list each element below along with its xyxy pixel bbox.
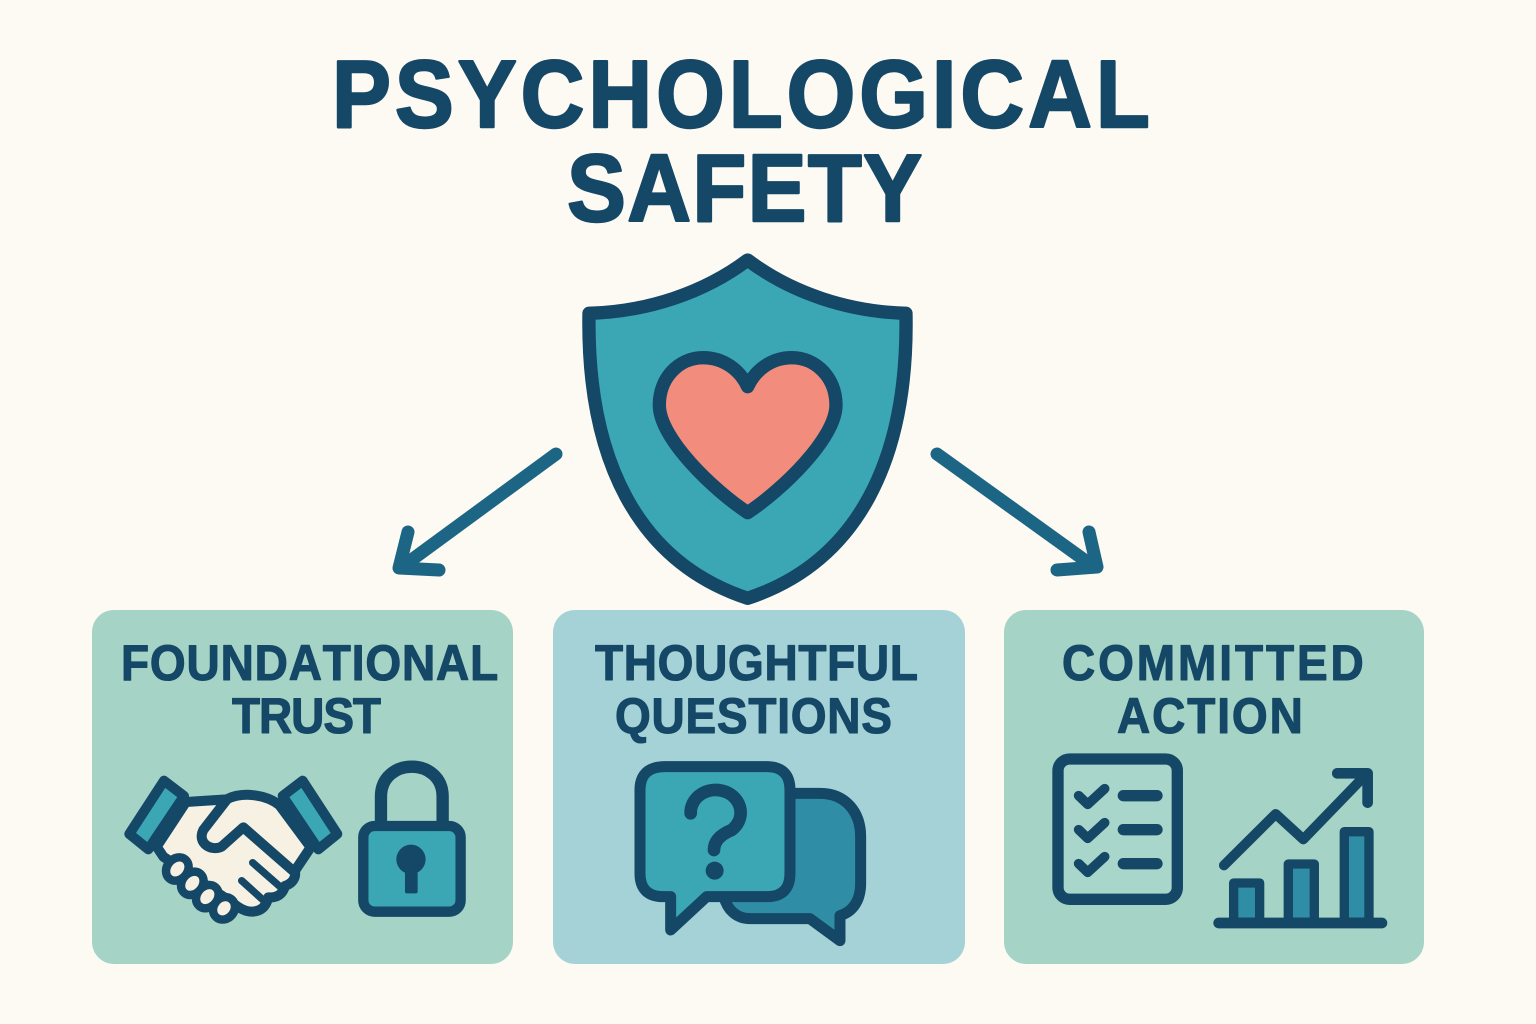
icon: speech bubbles with question mark	[640, 767, 861, 941]
arrow: to committed action	[937, 454, 1097, 570]
icon: padlock	[363, 767, 461, 912]
panel: thoughtful questions	[553, 610, 965, 964]
heading: thoughtful questions	[595, 636, 918, 744]
heading: foundational trust: FOUNDATIONAL	[121, 636, 498, 691]
heading: committed action	[1062, 636, 1364, 744]
panel: committed action	[1004, 610, 1424, 964]
heading: foundational trust	[121, 636, 498, 744]
icon: shield with heart	[589, 260, 906, 598]
heading: thoughtful questions: QUESTIONS	[615, 689, 892, 744]
title	[332, 41, 1150, 242]
heading: committed action: ACTION	[1117, 689, 1303, 744]
icon: checklist	[1058, 759, 1177, 899]
panel: foundational trust	[92, 610, 513, 964]
icon: heart	[659, 358, 836, 513]
arrow: to foundational trust	[399, 454, 556, 570]
heading: foundational trust: TRUST	[232, 689, 381, 744]
heading: thoughtful questions: THOUGHTFUL	[595, 636, 918, 691]
icon: growth chart	[1219, 773, 1382, 923]
title: PSYCHOLOGICAL	[332, 41, 1150, 148]
heading: committed action: COMMITTED	[1062, 636, 1364, 691]
icon: handshake	[129, 781, 337, 924]
title: SAFETY	[567, 135, 922, 242]
